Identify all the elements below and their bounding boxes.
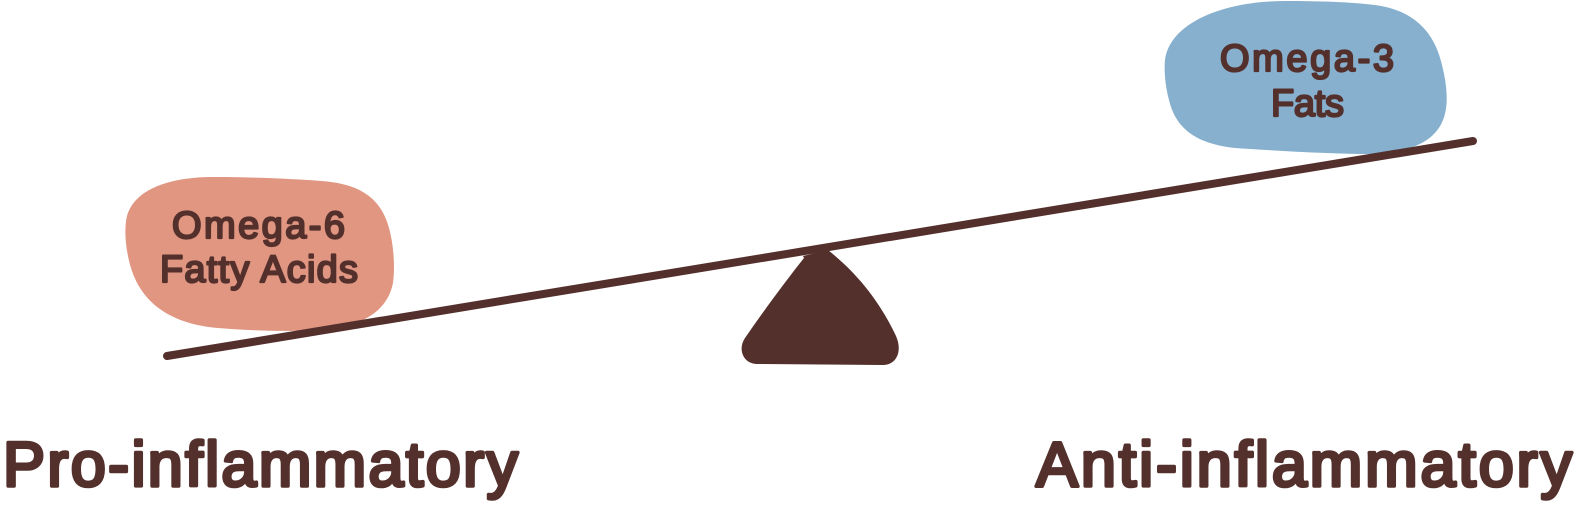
omega-6 blob with label [125,177,394,331]
omega-3 label: Omega-3 [1220,38,1394,80]
omega-6 label: Omega-6 [172,205,345,247]
label: anti-inflammatory: Anti-inflammatory [1036,430,1572,500]
omega-6 label [160,205,358,291]
omega-3 label: Fats [1271,83,1344,125]
omega-3 blob with label [1165,1,1447,154]
omega-3 label [1220,38,1394,125]
seesaw fulcrum [742,250,899,365]
label: pro-inflammatory: Pro-inflammatory [3,430,518,500]
omega-6 label: Fatty Acids [160,249,358,291]
seesaw beam [167,141,1473,356]
